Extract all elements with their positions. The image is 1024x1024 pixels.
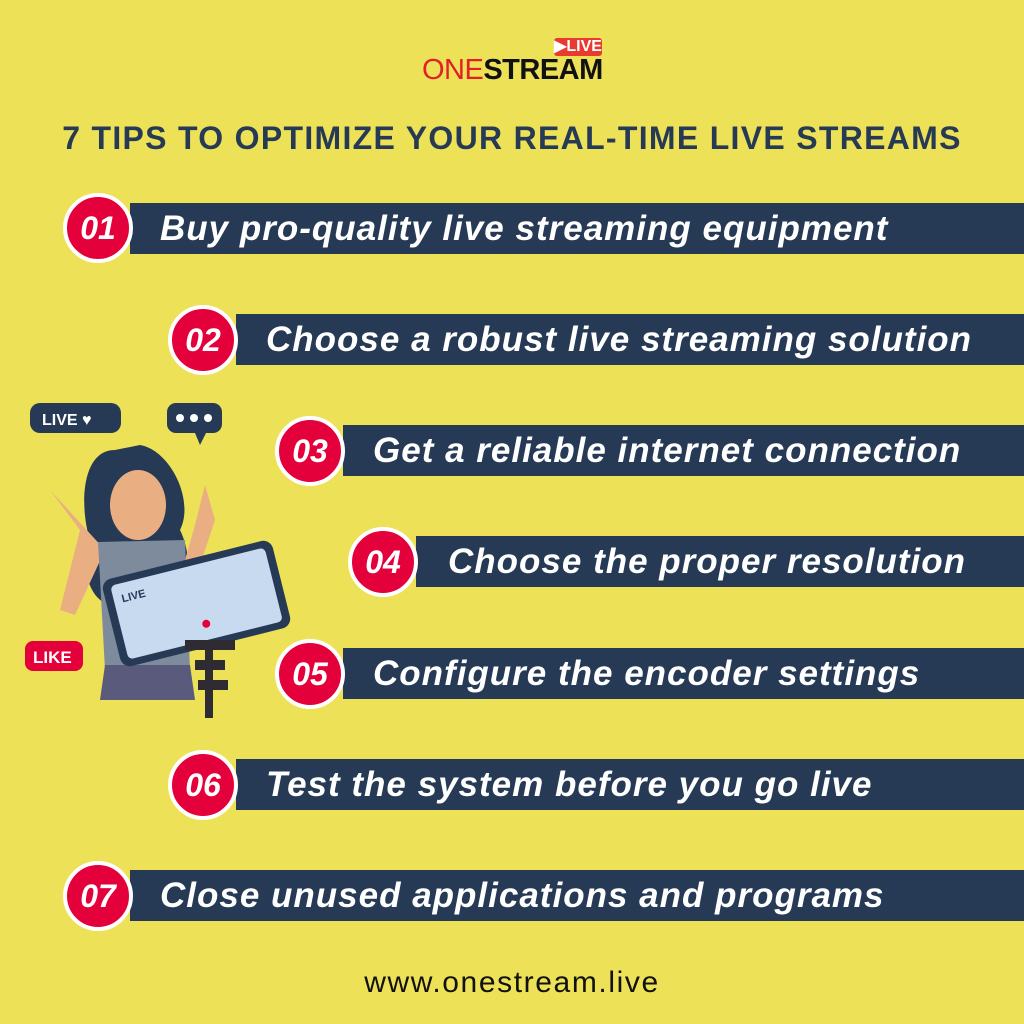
badge 4 <box>348 527 418 597</box>
badge 3 <box>275 416 345 486</box>
woman <box>50 445 215 700</box>
tip 6: Test the system before you go live <box>266 765 872 804</box>
chat bubble <box>167 403 222 445</box>
tip 6 <box>236 759 1024 810</box>
tip 4 <box>416 536 1024 587</box>
footer url: www.onestream.live <box>364 966 660 999</box>
badge 4: 04 <box>365 544 401 580</box>
badge 1 <box>63 193 133 263</box>
live heart bubble <box>30 403 121 433</box>
like badge <box>25 641 83 671</box>
tip 7: Close unused applications and programs <box>160 876 885 915</box>
tip 1: Buy pro-quality live streaming equipment <box>160 209 888 248</box>
phone: LIVE <box>120 588 147 605</box>
tip 3 <box>343 425 1024 476</box>
logo <box>422 38 603 86</box>
tip 1 <box>130 203 1024 254</box>
phone <box>101 539 292 668</box>
tripod <box>185 640 235 718</box>
like badge: LIKE <box>33 648 72 667</box>
tip 3: Get a reliable internet connection <box>373 431 961 470</box>
logo live badge: ▶LIVE <box>554 38 602 55</box>
badge 1: 01 <box>80 210 116 246</box>
badge 2: 02 <box>185 322 221 358</box>
badge 6 <box>168 750 238 820</box>
badge 2 <box>168 305 238 375</box>
title: 7 TIPS TO OPTIMIZE YOUR REAL-TIME LIVE STREAMS <box>62 120 962 156</box>
tip 5 <box>343 648 1024 699</box>
badge 6: 06 <box>185 767 221 803</box>
tip 2 <box>236 314 1024 365</box>
logo wordmark: ONESTREAM <box>422 54 603 86</box>
badge 5 <box>275 639 345 709</box>
badge 5: 05 <box>292 656 328 692</box>
badge 3: 03 <box>292 433 328 469</box>
illustration: streamer with phone <box>25 403 290 718</box>
badge 7 <box>63 861 133 931</box>
tip 5: Configure the encoder settings <box>373 654 920 693</box>
tip 2: Choose a robust live streaming solution <box>266 320 972 359</box>
live heart bubble: LIVE ♥ <box>42 412 92 429</box>
tip 7 <box>130 870 1024 921</box>
tip 4: Choose the proper resolution <box>448 542 966 581</box>
badge 7: 07 <box>80 878 116 914</box>
